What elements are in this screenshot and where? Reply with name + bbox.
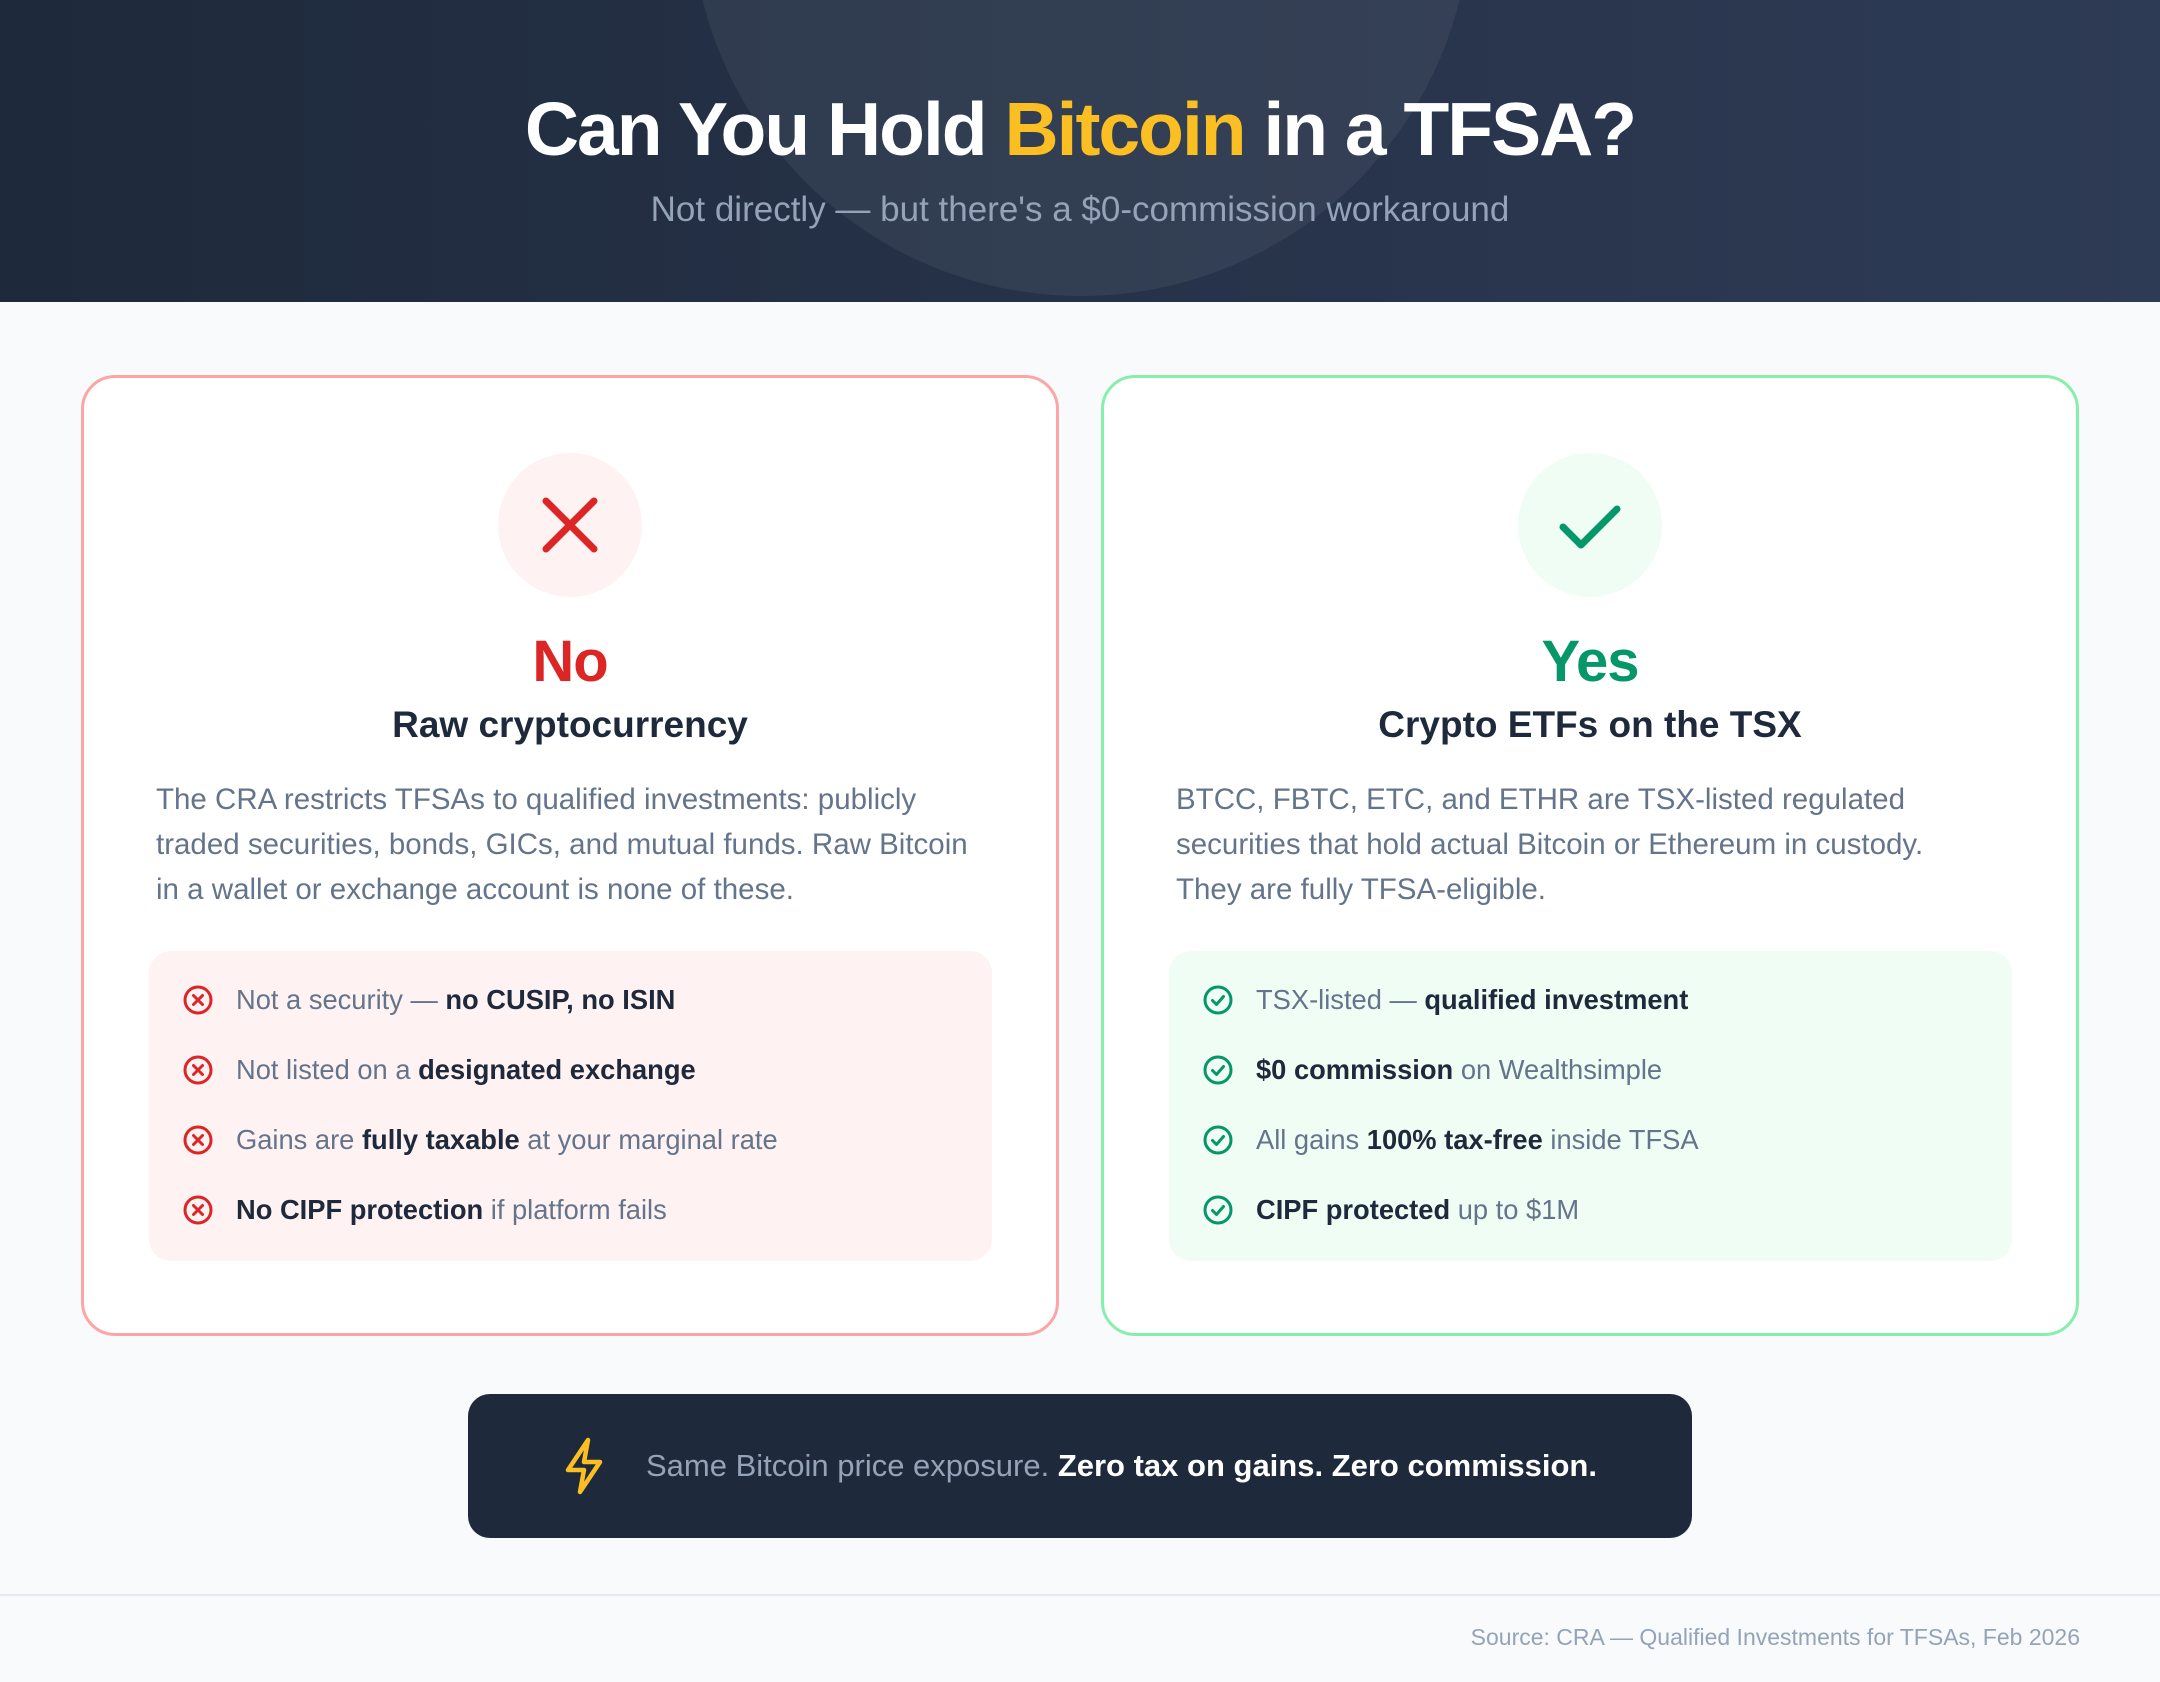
- text block: The CRA restricts TFSAs to qualified investments: publicly: [156, 783, 916, 816]
- text block: in a wallet or exchange account is none of these.: [156, 873, 794, 906]
- subheading: Raw cryptocurrency: [392, 704, 748, 745]
- source footer: Source: CRA — Qualified Investments for TFSAs, Feb 2026: [1471, 1624, 2080, 1650]
- callout banner: Same Bitcoin price exposure.: [646, 1448, 1049, 1483]
- list: cons: no CUSIP, no ISIN: [445, 984, 675, 1015]
- list: cons: designated exchange: [418, 1054, 696, 1085]
- callout banner: [468, 1394, 1692, 1538]
- title: Can You Hold Bitcoin in a TFSA?: [525, 87, 1635, 171]
- heading: No: No: [532, 629, 608, 694]
- list: pros: TSX-listed —: [1256, 984, 1417, 1015]
- list: pros: 100% tax-free: [1367, 1124, 1543, 1155]
- text block: BTCC, FBTC, ETC, and ETHR are TSX-listed regulated: [1176, 783, 1905, 816]
- text block: [156, 783, 968, 906]
- panel: yes: [1101, 375, 2079, 1336]
- list: cons: Not listed on a: [236, 1054, 410, 1085]
- text block: [1176, 783, 1923, 906]
- list: cons: if platform fails: [491, 1194, 667, 1225]
- callout banner: Zero tax on gains. Zero commission.: [1058, 1448, 1597, 1483]
- list: cons: No CIPF protection: [236, 1194, 483, 1225]
- subtitle: Not directly — but there's a $0-commission workaround: [651, 190, 1509, 229]
- list: pros: qualified investment: [1424, 984, 1688, 1015]
- heading: Yes: Yes: [1542, 629, 1638, 694]
- icon: lightning: [566, 1438, 602, 1494]
- text block: traded securities, bonds, GICs, and mutual funds. Raw Bitcoin: [156, 828, 968, 861]
- list: cons: fully taxable: [362, 1124, 520, 1155]
- subheading: Crypto ETFs on the TSX: [1378, 704, 1802, 745]
- list: pros: up to $1M: [1458, 1194, 1579, 1225]
- list: pros: $0 commission: [1256, 1054, 1453, 1085]
- panel: no: [81, 375, 1059, 1336]
- list: pros: CIPF protected: [1256, 1194, 1450, 1225]
- text block: securities that hold actual Bitcoin or Ethereum in custody.: [1176, 828, 1923, 861]
- list: cons: [149, 951, 992, 1261]
- list: cons: Gains are at your marginal rate: [236, 1124, 778, 1155]
- list: pros: on Wealthsimple: [1461, 1054, 1662, 1085]
- list: pros: [1169, 951, 2012, 1261]
- list: cons: Not a security —: [236, 984, 438, 1015]
- list: pros: All gains inside TFSA: [1256, 1124, 1699, 1155]
- icon: check: [1518, 453, 1662, 597]
- text block: They are fully TFSA-eligible.: [1176, 873, 1546, 906]
- icon: x: [498, 453, 642, 597]
- header: [0, 0, 2160, 302]
